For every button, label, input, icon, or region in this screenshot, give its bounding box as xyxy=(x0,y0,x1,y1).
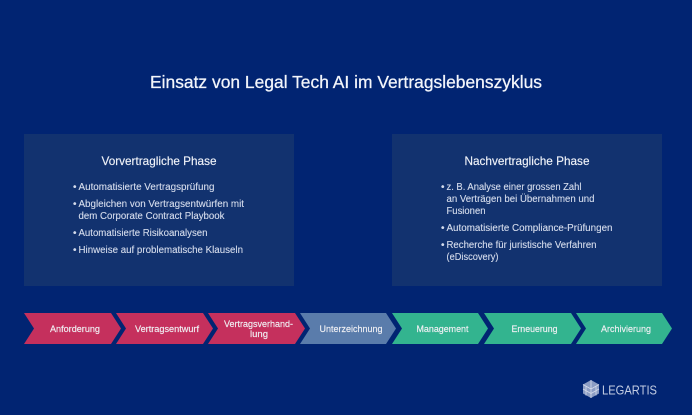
panel: Nachvertragliche Phase xyxy=(392,134,662,286)
bullet list: pre-contract items: • xyxy=(73,245,77,256)
bullet list: pre-contract items: Automatisierte Risikoanalysen xyxy=(78,228,208,239)
chevron: Management: Management xyxy=(416,324,469,334)
bullet list: post-contract items: • xyxy=(441,223,445,234)
logo: Legartis xyxy=(583,380,657,398)
title: Einsatz von Legal Tech AI im Vertragslebenszyklus xyxy=(150,72,542,92)
chevron: Unterzeichnung: Unterzeichnung xyxy=(320,324,382,334)
chevron: Erneuerung xyxy=(484,313,581,344)
bullet list: pre-contract items: • xyxy=(73,228,77,239)
bullet list: post-contract items: Automatisierte Compliance-Prüfungen xyxy=(446,223,612,234)
bullet list: pre-contract items xyxy=(73,182,244,256)
chevron: Vertragsverhandlung: lung xyxy=(250,329,268,339)
bullet list: post-contract items: • xyxy=(441,240,445,251)
chevron: Vertragsentwurf: Vertragsentwurf xyxy=(135,324,200,334)
bullet list: pre-contract items: • xyxy=(73,182,77,193)
chevron: Vertragsverhandlung xyxy=(208,313,305,344)
bullet list: post-contract items: Fusionen xyxy=(446,206,486,217)
bullet list: pre-contract items: Abgleichen von Vertragsentwürfen mit xyxy=(78,199,244,210)
panel: Vorvertragliche Phase xyxy=(24,134,294,286)
chevron: Unterzeichnung xyxy=(300,313,396,344)
chevron: Erneuerung: Erneuerung xyxy=(512,324,558,334)
heading: Nachvertragliche Phase: Nachvertragliche Phase xyxy=(464,154,590,168)
bullet list: post-contract items: • xyxy=(441,182,445,193)
bullet list: pre-contract items: Automatisierte Vertragsprüfung xyxy=(78,182,214,193)
bullet list: post-contract items: (eDiscovery) xyxy=(446,252,498,263)
icon: Legartis cube xyxy=(583,380,599,398)
heading: Vorvertragliche Phase: Vorvertragliche Phase xyxy=(102,154,217,168)
chevron: Archivierung: Archivierung xyxy=(601,324,651,334)
wordmark: LEGARTIS xyxy=(602,384,657,398)
chevron: Anforderung: Anforderung xyxy=(50,324,100,334)
chevron: Management xyxy=(392,313,488,344)
bullet list: pre-contract items: dem Corporate Contract Playbook xyxy=(78,211,225,222)
chevron: Archivierung xyxy=(576,313,672,344)
chevron: Anforderung xyxy=(24,313,121,344)
bullet list: pre-contract items: • xyxy=(73,199,77,210)
bullet list: post-contract items: z. B. Analyse einer grossen Zahl xyxy=(446,182,582,193)
bullet list: post-contract items: Recherche für juristische Verfahren xyxy=(446,240,596,251)
chevron: Vertragsverhandlung: Vertragsverhand- xyxy=(224,319,293,329)
bullet list: post-contract items xyxy=(441,182,612,263)
chevron: Vertragsentwurf xyxy=(116,313,213,344)
process chevrons xyxy=(24,313,672,344)
bullet list: pre-contract items: Hinweise auf problematische Klauseln xyxy=(78,245,243,256)
bullet list: post-contract items: an Verträgen bei Übernahmen und xyxy=(446,193,594,205)
